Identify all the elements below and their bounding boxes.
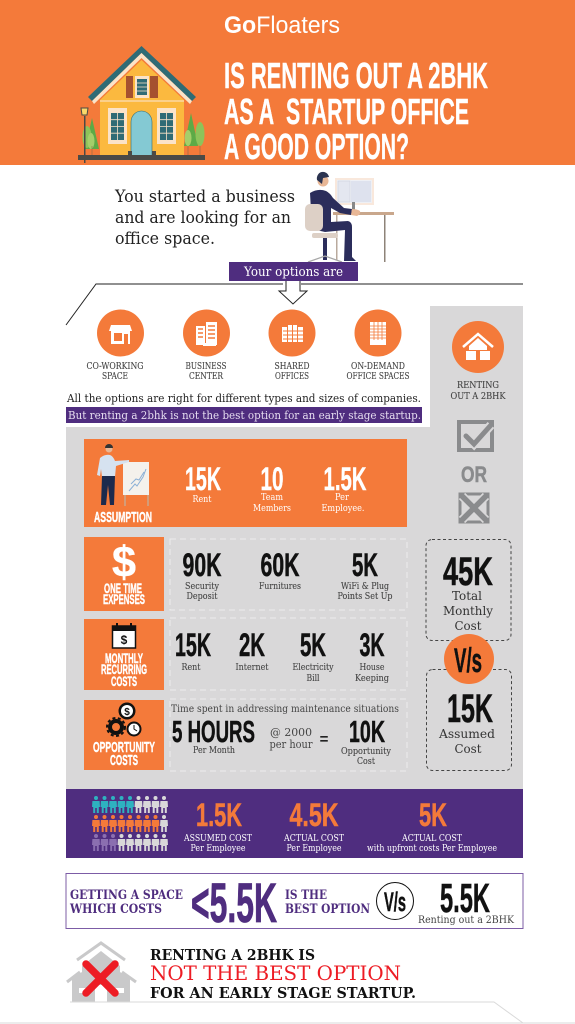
monthly label: RECURRING bbox=[101, 662, 147, 677]
arrow bbox=[279, 281, 307, 304]
callout: total monthly cost: Monthly bbox=[443, 603, 494, 618]
callout: assumed cost bbox=[426, 670, 512, 770]
stat: electricity bill: 5K bbox=[300, 627, 326, 663]
option labels: SPACE bbox=[102, 371, 128, 382]
icon: house circle bbox=[452, 321, 504, 373]
callout: total monthly cost bbox=[426, 540, 511, 640]
icon: business center bbox=[183, 310, 230, 356]
stat: furnitures: Furnitures bbox=[259, 581, 301, 592]
title: A GOOD OPTION? bbox=[224, 126, 409, 167]
panel: per employee cost bbox=[66, 789, 523, 858]
monthly label: COSTS bbox=[111, 674, 137, 689]
stat: security deposit: Deposit bbox=[186, 591, 218, 602]
stat: team members: Members bbox=[253, 503, 291, 514]
intro text bbox=[114, 187, 295, 249]
stat: per employee: Employee. bbox=[322, 503, 364, 514]
text: is the best option bbox=[285, 888, 370, 917]
one time label: ONE TIME bbox=[104, 581, 142, 596]
stat: actual cost: ACTUAL COST bbox=[283, 833, 345, 844]
stat: assumed cost: 1.5K bbox=[196, 797, 242, 833]
icon: crossed-out house bbox=[67, 943, 136, 1002]
stat: actual cost with upfront costs bbox=[367, 797, 497, 854]
icon: calendar bbox=[112, 623, 136, 648]
stat: rent: 15K bbox=[175, 627, 211, 663]
label: your options are bbox=[229, 262, 358, 281]
option labels: CO-WORKING bbox=[86, 361, 144, 372]
option labels: OFFICES bbox=[275, 371, 309, 382]
stat: actual cost with upfront costs: ACTUAL COST bbox=[401, 833, 463, 844]
stat: opportunity cost: Cost bbox=[357, 756, 375, 767]
stat: wifi and plug points: Points Set Up bbox=[338, 591, 392, 602]
panel: monthly recurring costs bbox=[84, 618, 407, 690]
stat: rent: Rent bbox=[192, 494, 212, 505]
stat: actual cost with upfront costs: with upfront costs Per Employee bbox=[367, 843, 497, 854]
badge: versus outline bbox=[376, 882, 414, 920]
icon: gears and coins: $ bbox=[124, 707, 130, 718]
one time label bbox=[103, 581, 145, 607]
stat: per employee: 1.5K bbox=[324, 461, 366, 497]
stat: security deposit: Security bbox=[185, 581, 220, 592]
stat: internet bbox=[236, 627, 269, 673]
equals sign: = bbox=[320, 731, 329, 748]
panel: renting out a 2BHK bbox=[450, 321, 506, 522]
stat: team members bbox=[253, 461, 291, 514]
stat: five hours: Per Month bbox=[193, 745, 235, 756]
connector line bbox=[66, 284, 523, 325]
option labels: CENTER bbox=[189, 371, 224, 382]
stat: house keeping: Keeping bbox=[355, 673, 389, 684]
option labels: ON-DEMAND bbox=[351, 361, 405, 372]
option labels bbox=[86, 361, 410, 382]
intro text: office space. bbox=[115, 229, 215, 249]
icon: shared offices bbox=[268, 310, 316, 356]
stat: wifi and plug points: WiFi & Plug bbox=[341, 581, 389, 592]
badge: versus bbox=[444, 634, 494, 684]
opportunity label: COSTS bbox=[110, 752, 138, 769]
monthly label bbox=[101, 651, 147, 689]
callout: assumed cost: Assumed bbox=[438, 726, 495, 741]
logo: GoFloaters: GoFloaters bbox=[224, 12, 340, 39]
badge: versus outline: V/s bbox=[384, 887, 406, 917]
conclusion: NOT THE BEST OPTION bbox=[150, 961, 401, 985]
stat: wifi and plug points bbox=[338, 547, 392, 602]
renting label: OUT A 2BHK bbox=[450, 391, 506, 402]
stat: house keeping: House bbox=[360, 662, 385, 673]
icon: dollar: $ bbox=[112, 538, 136, 587]
stat: opportunity cost: Opportunity bbox=[341, 746, 392, 757]
stat: actual cost with upfront costs: 5K bbox=[419, 797, 447, 833]
icon: cross box bbox=[460, 494, 488, 522]
options statement: All the options are right for different types and sizes of companies. bbox=[66, 391, 421, 405]
conclusion: RENTING A 2BHK IS bbox=[150, 946, 315, 964]
one time label: EXPENSES bbox=[103, 592, 145, 607]
stat: rent: 15K bbox=[185, 461, 221, 497]
callout: assumed cost: 15K bbox=[447, 687, 493, 731]
panel: one time expenses bbox=[84, 537, 407, 611]
stat: rate per hour bbox=[270, 726, 313, 751]
icon: co-working space bbox=[97, 310, 144, 356]
conclusion: FOR AN EARLY STAGE STARTUP. bbox=[150, 984, 416, 1002]
stat: five hours: 5 HOURS bbox=[172, 714, 255, 749]
stat: electricity bill: Electricity bbox=[292, 662, 334, 673]
stat: rent bbox=[175, 627, 211, 673]
stat: per employee bbox=[322, 461, 366, 514]
stat: rent: Rent bbox=[182, 662, 201, 673]
highlighted statement: But renting a 2bhk is not the best option for an early stage startup. bbox=[68, 408, 421, 422]
panel: best option comparison bbox=[66, 871, 523, 934]
stat: per employee: Per bbox=[335, 492, 349, 503]
stat: assumed cost bbox=[183, 797, 253, 854]
stat: internet: 2K bbox=[239, 627, 265, 663]
stat: opportunity cost bbox=[341, 714, 392, 767]
monthly label: MONTHLY bbox=[105, 651, 143, 666]
stat: furnitures: 60K bbox=[260, 547, 300, 583]
renting label bbox=[450, 380, 506, 402]
text: is the best option: IS THE bbox=[285, 888, 327, 903]
stat: rate per hour: per hour bbox=[270, 738, 313, 751]
stat: electricity bill bbox=[292, 627, 334, 684]
maintenance note: Time spent in addressing maintenance situations bbox=[171, 704, 399, 715]
stat: furnitures bbox=[259, 547, 301, 592]
panel: opportunity costs bbox=[84, 699, 407, 771]
stat: assumed cost: Per Employee bbox=[190, 843, 246, 854]
text: getting a space which costs: GETTING A SPACE bbox=[70, 888, 183, 903]
stat: opportunity cost: 10K bbox=[349, 714, 385, 749]
stat: electricity bill: Bill bbox=[306, 673, 320, 684]
opportunity label bbox=[93, 739, 155, 769]
pictogram: employees bbox=[92, 796, 168, 851]
callout: assumed cost: Cost bbox=[454, 741, 482, 756]
stat: team members: 10 bbox=[260, 461, 284, 497]
stat: house keeping bbox=[355, 627, 389, 684]
option labels: OFFICE SPACES bbox=[346, 371, 410, 382]
stat: actual cost: 4.5K bbox=[290, 797, 338, 833]
stat: renting out a 2BHK bbox=[418, 875, 514, 926]
stat: internet: Internet bbox=[236, 662, 269, 673]
stat: security deposit: 90K bbox=[182, 547, 222, 583]
stat: less than 5.5K: <5.5K bbox=[191, 871, 277, 934]
opportunity label: OPPORTUNITY bbox=[93, 739, 155, 756]
callout: total monthly cost: Total bbox=[452, 588, 482, 603]
intro text: and are looking for an bbox=[115, 208, 291, 228]
stat: assumed cost: ASSUMED COST bbox=[183, 833, 253, 844]
icon: house illustration bbox=[78, 46, 205, 163]
badge: versus: V/s bbox=[454, 642, 482, 680]
stat: wifi and plug points: 5K bbox=[352, 547, 378, 583]
stat: rent bbox=[185, 461, 221, 505]
panel: gray background bbox=[66, 306, 523, 789]
text: or: OR bbox=[461, 462, 487, 487]
icon: gears and coins bbox=[107, 702, 140, 736]
icon: calendar: $ bbox=[121, 633, 128, 647]
stat: five hours bbox=[172, 714, 255, 756]
stat: actual cost: Per Employee bbox=[286, 843, 342, 854]
stat: actual cost bbox=[283, 797, 345, 854]
callout: total monthly cost: 45K bbox=[443, 550, 493, 594]
stat: renting out a 2BHK: Renting out a 2BHK bbox=[418, 915, 514, 926]
callout: total monthly cost: Cost bbox=[454, 618, 482, 633]
stat: security deposit bbox=[182, 547, 222, 602]
assumption label: ASSUMPTION bbox=[94, 509, 152, 526]
text: getting a space which costs: WHICH COSTS bbox=[69, 902, 162, 917]
stat: renting out a 2BHK: 5.5K bbox=[440, 875, 490, 921]
header band bbox=[0, 0, 575, 167]
title bbox=[224, 55, 488, 167]
stat: house keeping: 3K bbox=[360, 627, 384, 663]
option labels: BUSINESS bbox=[186, 361, 226, 372]
renting label: RENTING bbox=[457, 380, 499, 391]
stat: team members: Team bbox=[261, 492, 283, 503]
option labels: SHARED bbox=[274, 361, 310, 372]
text: getting a space which costs bbox=[69, 888, 183, 917]
panel: assumption bbox=[84, 439, 407, 527]
panel: office options bbox=[66, 310, 422, 423]
icon: check box bbox=[459, 422, 492, 450]
label: your options are: Your options are bbox=[243, 265, 343, 280]
stat: rate per hour: @ 2000 bbox=[270, 726, 312, 739]
conclusion bbox=[150, 946, 416, 1002]
text: is the best option: BEST OPTION bbox=[285, 902, 370, 917]
icon: on-demand office spaces bbox=[354, 310, 402, 356]
icon: presenter at flip chart bbox=[97, 444, 149, 506]
intro text: You started a business bbox=[114, 187, 295, 207]
icon: person at desk bbox=[305, 172, 394, 262]
